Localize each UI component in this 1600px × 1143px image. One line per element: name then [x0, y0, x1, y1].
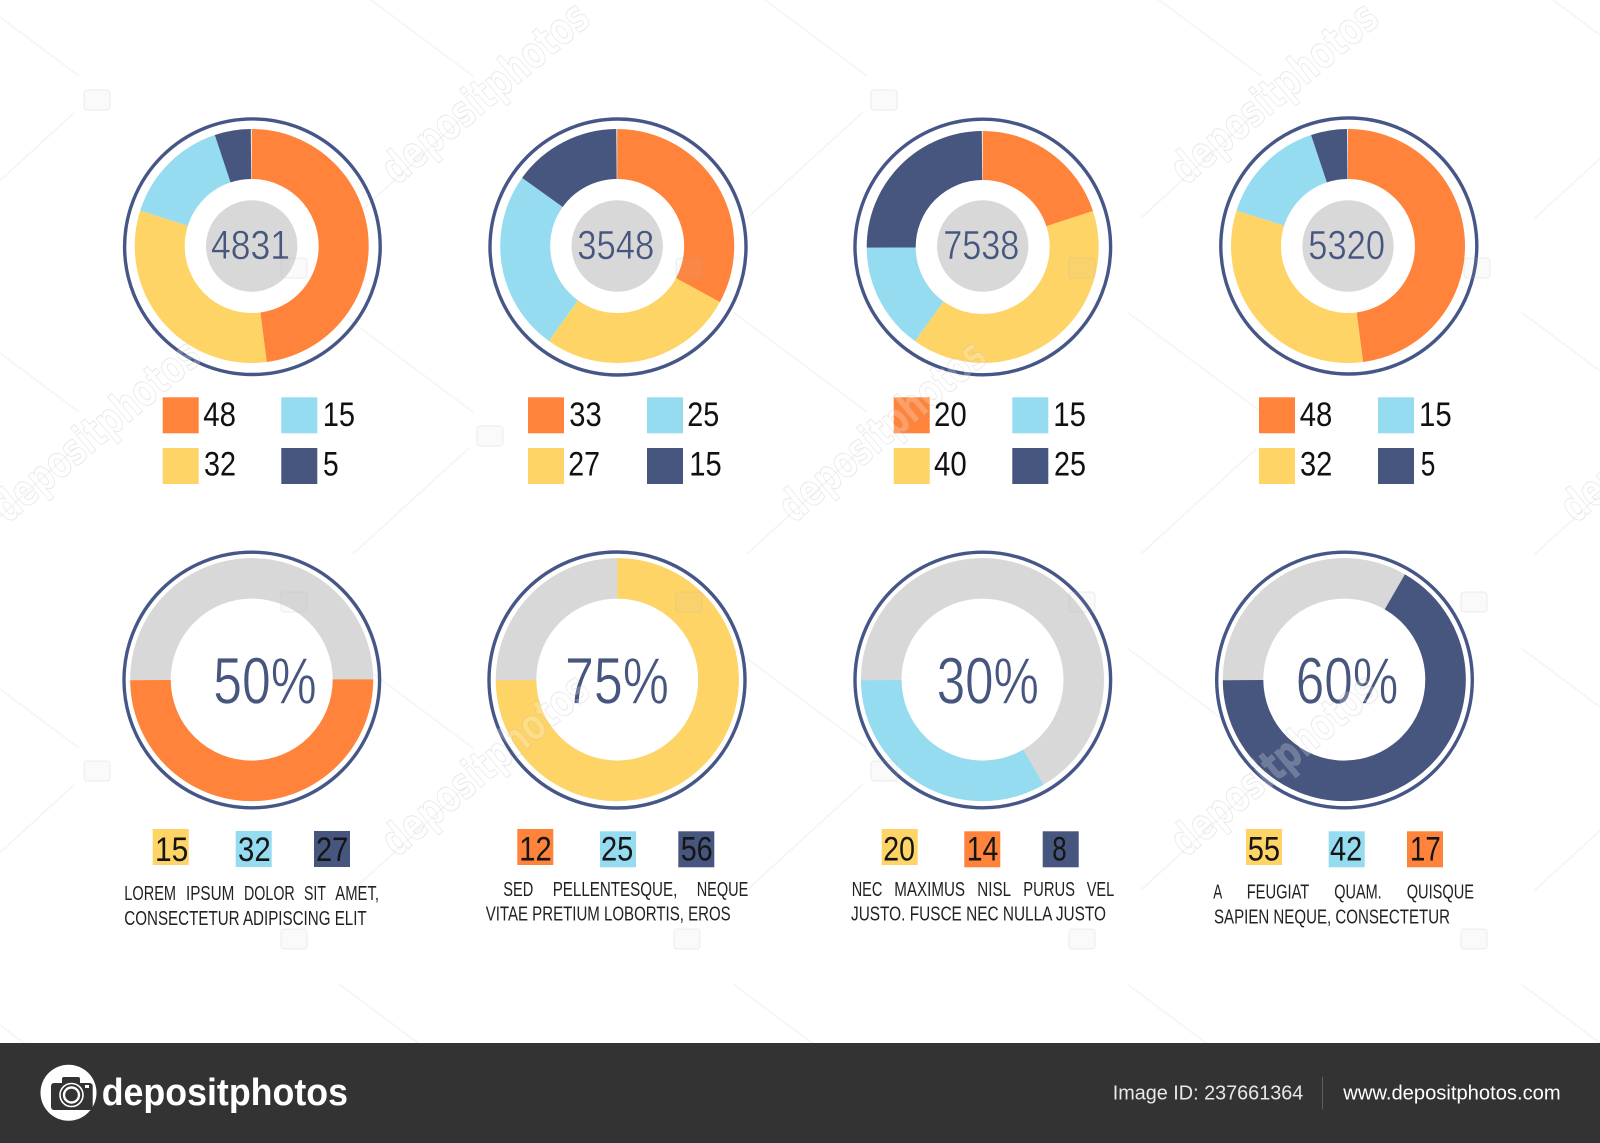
ring chart 60%: [1217, 552, 1472, 808]
percent label 75%: 75%: [565, 644, 669, 718]
legend 5320: 5: [1421, 446, 1435, 484]
legend 3548: 27: [568, 446, 600, 484]
center value 4831: [206, 200, 297, 292]
caption nec maximus: PURUS: [1023, 879, 1075, 901]
value tags 55 42 17: [1246, 829, 1443, 869]
legend 5320: [1259, 396, 1452, 484]
center value 4831: 4831: [211, 222, 290, 268]
legend 3548: [528, 396, 722, 484]
caption lorem ipsum: DOLOR: [244, 883, 295, 905]
value tags 20 14 8: [882, 829, 1079, 869]
panel: donut 5320 with legend: [1221, 118, 1477, 484]
caption a feugiat quam: QUISQUE: [1407, 881, 1474, 903]
legend 5320: 48: [1300, 396, 1332, 434]
percent label 50%: 50%: [213, 644, 317, 718]
caption nec maximus: NISL: [977, 879, 1011, 901]
caption lorem ipsum: IPSUM: [186, 883, 234, 905]
value tags 20 14 8: 20: [883, 831, 915, 869]
logo wordmark: depositphotos: [102, 1072, 348, 1114]
legend 7538: 25: [1054, 446, 1086, 484]
caption a feugiat quam: QUAM.: [1334, 881, 1382, 903]
value tags 20 14 8: 14: [967, 831, 998, 869]
legend 7538: 15: [1053, 396, 1086, 434]
legend 7538: [894, 396, 1086, 484]
donut chart 7538: [855, 119, 1111, 375]
legend 3548: 15: [689, 446, 722, 484]
caption nec maximus: [851, 879, 1114, 926]
donut chart 3548: [490, 119, 746, 375]
value tags 15 32 27: 15: [155, 831, 188, 869]
legend 4831: [163, 396, 355, 484]
value tags 12 25 56: 25: [601, 831, 633, 869]
caption sed pellentesque: PELLENTESQUE,: [553, 879, 677, 901]
legend 3548: 33: [569, 396, 602, 434]
caption lorem ipsum: LOREM: [124, 883, 176, 905]
center value 5320: 5320: [1308, 222, 1385, 268]
caption a feugiat quam: FEUGIAT: [1247, 881, 1309, 903]
caption lorem ipsum: [124, 883, 379, 930]
caption nec maximus: VEL: [1087, 879, 1114, 901]
ring chart 50%: [124, 552, 380, 808]
panel: progress ring 60%: [1213, 552, 1474, 928]
website url: www.depositphotos.com: [1342, 1082, 1561, 1104]
center value 3548: 3548: [577, 222, 654, 268]
center value 7538: 7538: [943, 222, 1019, 268]
legend 4831: 32: [204, 446, 236, 484]
caption nec maximus: MAXIMUS: [894, 879, 965, 901]
value tags 15 32 27: 27: [316, 831, 348, 869]
watermark: diagonal depositphotos marks: depositphotos: [371, 663, 599, 866]
panel: progress ring 75%: [486, 552, 748, 926]
caption a feugiat quam: SAPIEN NEQUE, CONSECTETUR: [1214, 906, 1450, 928]
caption lorem ipsum: CONSECTETUR ADIPISCING ELIT: [124, 908, 367, 930]
footer bar: [0, 1043, 1600, 1143]
percent label 30%: 30%: [937, 644, 1039, 718]
panel: progress ring 50%: [124, 552, 380, 930]
ring chart 75%: [489, 552, 745, 808]
caption nec maximus: JUSTO. FUSCE NEC NULLA JUSTO: [851, 904, 1106, 926]
legend 5320: 32: [1300, 446, 1332, 484]
value tags 12 25 56: 12: [519, 831, 552, 869]
caption sed pellentesque: SED: [503, 879, 533, 901]
value tags 12 25 56: [517, 829, 714, 869]
watermark: small camera marks: [84, 90, 1490, 949]
percent label 60%: 60%: [1296, 644, 1398, 718]
caption sed pellentesque: NEQUE: [697, 879, 748, 901]
value tags 15 32 27: 32: [238, 831, 271, 869]
value tags 20 14 8: 8: [1052, 831, 1067, 869]
legend 7538: 40: [934, 446, 967, 484]
caption sed pellentesque: [486, 879, 748, 926]
value tags 55 42 17: 17: [1410, 831, 1441, 869]
legend 7538: 20: [934, 396, 967, 434]
center value 5320: [1302, 200, 1394, 292]
caption nec maximus: NEC: [852, 879, 882, 901]
legend 4831: 5: [323, 446, 339, 484]
value tags 55 42 17: 42: [1330, 831, 1362, 869]
watermark: diagonal depositphotos marks: [0, 0, 1600, 866]
caption a feugiat quam: A: [1213, 881, 1223, 903]
icon: camera logo: [40, 1065, 96, 1121]
value tags 12 25 56: 56: [681, 831, 713, 869]
donut chart 4831: [125, 119, 380, 374]
value tags 15 32 27: [153, 829, 350, 869]
value tags 55 42 17: 55: [1248, 831, 1280, 869]
watermark: diagonal depositphotos marks: depositphotos: [1160, 663, 1388, 866]
panel: donut 7538 with legend: [855, 119, 1111, 484]
watermark: diagonal depositphotos marks: depositphotos: [768, 329, 996, 532]
panel: donut 3548 with legend: [490, 119, 746, 484]
legend 4831: 48: [203, 396, 236, 434]
center value 7538: [937, 200, 1028, 292]
panel: progress ring 30%: [851, 552, 1114, 926]
donut chart 5320: [1221, 118, 1477, 374]
caption sed pellentesque: VITAE PRETIUM LOBORTIS, EROS: [486, 904, 731, 926]
center value 3548: [572, 200, 663, 292]
caption lorem ipsum: AMET,: [335, 883, 379, 905]
ring chart 30%: [855, 552, 1111, 808]
caption lorem ipsum: SIT: [304, 883, 326, 905]
caption a feugiat quam: [1213, 881, 1474, 928]
legend 4831: 15: [323, 396, 355, 434]
legend 5320: 15: [1419, 396, 1452, 434]
image id: Image ID: 237661364: [1113, 1082, 1303, 1104]
panel: donut 4831 with legend: [125, 119, 380, 484]
legend 3548: 25: [687, 396, 719, 434]
